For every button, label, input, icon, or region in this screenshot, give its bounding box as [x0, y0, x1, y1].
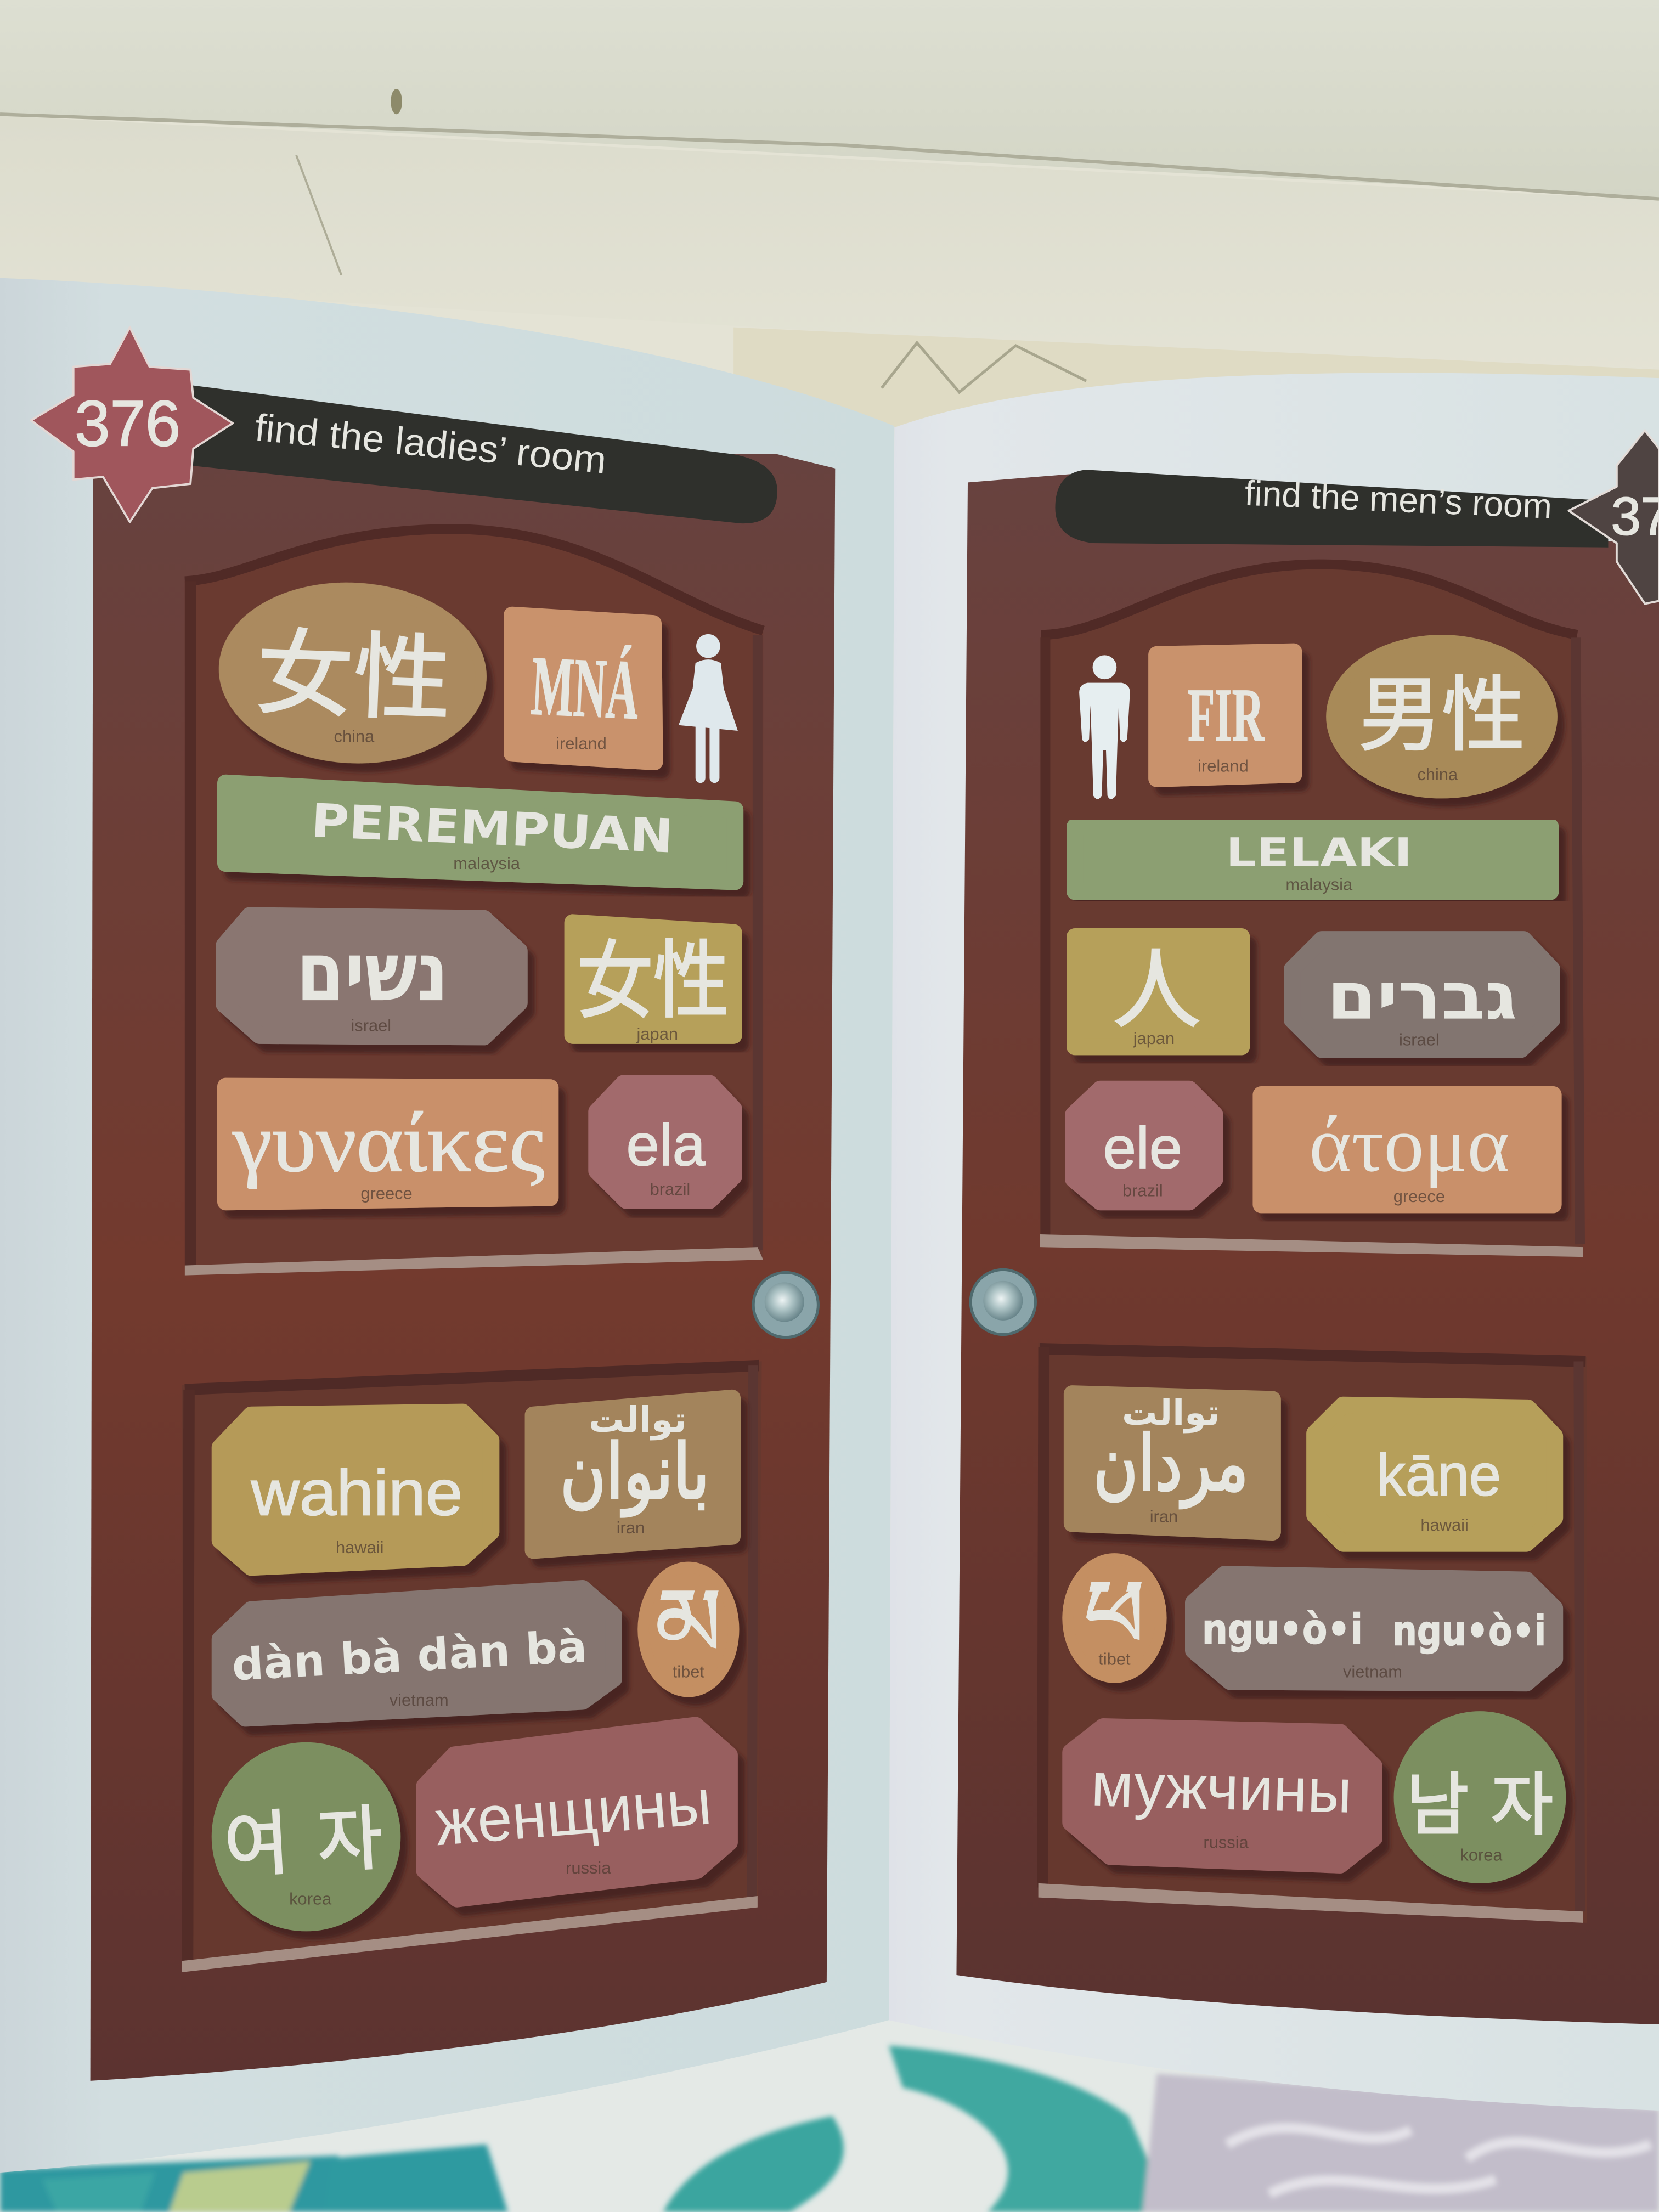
sign: korea: [1400, 1717, 1560, 1878]
sign: china: china: [1417, 765, 1458, 784]
sign: china: china: [334, 727, 375, 746]
sign: malaysia: LELAKI: [1226, 830, 1412, 876]
sign: russia: [1071, 1726, 1374, 1865]
panel: left door: [91, 454, 835, 2081]
sign: israel: israel: [1399, 1030, 1440, 1049]
left door upper panel frame: [185, 529, 763, 1276]
sign: japan: japan: [1133, 1029, 1175, 1048]
sign: israel: [1292, 940, 1552, 1049]
sign: china: 女性: [255, 597, 454, 739]
sign: russia: [425, 1725, 729, 1899]
sign: korea: korea: [1460, 1846, 1503, 1865]
sign: iran: توالت: [1122, 1392, 1220, 1434]
sign: malaysia: PEREMPUAN: [310, 794, 674, 864]
right door knob: [970, 1269, 1035, 1335]
sign: brazil: ela: [627, 1111, 706, 1178]
sign: tibet: ཕ: [1084, 1538, 1145, 1675]
sign: ireland: ireland: [556, 733, 607, 753]
sign: japan: [1075, 918, 1242, 1048]
sign: brazil: brazil: [650, 1180, 690, 1199]
sign: china: [220, 582, 486, 764]
icon: man: [1079, 655, 1130, 799]
sign: iran: iran: [1150, 1507, 1178, 1526]
sign: greece: greece: [360, 1184, 413, 1203]
sign: vietnam: vietnam: [390, 1690, 449, 1709]
sign: hawaii: wahine: [251, 1457, 462, 1530]
right door upper panel frame: [1040, 565, 1583, 1257]
sign: israel: israel: [351, 1016, 391, 1035]
sign: iran: توالت: [589, 1400, 687, 1441]
sign: iran: [533, 1398, 732, 1550]
sign: greece: [1261, 1094, 1553, 1206]
right door lower panel frame: [1039, 1343, 1587, 1923]
sign: ireland: FIR: [1188, 673, 1265, 758]
right header text: find the men’s room: [1244, 473, 1553, 526]
panel: right page: [889, 373, 1659, 2111]
sign: malaysia: malaysia: [1285, 875, 1353, 894]
sign: korea: korea: [289, 1889, 332, 1908]
sign: malaysia: [1075, 827, 1550, 894]
sign: malaysia: [225, 783, 735, 882]
sign: china: 男性: [1358, 648, 1525, 767]
sign: russia: женщины: [433, 1765, 714, 1859]
page number badge 377: [1568, 430, 1659, 604]
panel: right door: [956, 474, 1659, 2024]
sign: korea: 남자: [1407, 1750, 1553, 1848]
sign: iran: بانوان: [560, 1427, 709, 1517]
sign: vietnam: [1193, 1575, 1555, 1683]
sign: iran: مردان: [1093, 1419, 1249, 1508]
right header banner: [1055, 470, 1608, 548]
left door knob: [753, 1272, 818, 1338]
sign: japan: 人: [1113, 918, 1200, 1045]
sign: israel: גברים: [1327, 958, 1517, 1034]
sign: hawaii: hawaii: [336, 1538, 383, 1557]
sign: israel: נשים: [296, 925, 449, 1020]
panel: left page: [0, 278, 894, 2172]
sign: brazil: ele: [1103, 1114, 1182, 1181]
sign: korea: [217, 1748, 395, 1926]
sign: vietnam: dàn bà dàn bà: [230, 1621, 588, 1691]
sign: china: [1331, 640, 1552, 793]
number 376: 376: [75, 388, 180, 460]
sign: greece: άτομα: [1309, 1101, 1509, 1188]
sign: ireland: ireland: [1198, 757, 1249, 776]
vietnam word: second: ngu•ò•i: [1392, 1607, 1546, 1655]
left header banner: [190, 385, 777, 523]
sign: tibet: མ: [654, 1547, 722, 1684]
sign: vietnam: [220, 1588, 614, 1718]
sign: israel: [224, 916, 519, 1037]
sign: russia: russia: [566, 1858, 611, 1877]
sign: hawaii: [220, 1412, 491, 1567]
sign: japan: 女性: [577, 912, 729, 1035]
sign: brazil: [1074, 1089, 1215, 1202]
page number badge 376: [31, 328, 233, 522]
left header text: find the ladies’ room: [253, 406, 608, 482]
sign: vietnam: vietnam: [1343, 1662, 1402, 1681]
sign: russia: мужчины: [1090, 1750, 1353, 1826]
sign: japan: japan: [636, 1024, 678, 1043]
sign: hawaii: [1315, 1405, 1555, 1543]
icon: woman: [679, 634, 738, 783]
sign: greece: γυναίκες: [232, 1096, 545, 1189]
sign: malaysia: malaysia: [453, 854, 521, 873]
sign: russia: russia: [1203, 1833, 1249, 1852]
sign: ireland: MNÁ: [529, 639, 641, 737]
sign: brazil: [597, 1084, 733, 1200]
sign: iran: iran: [617, 1518, 645, 1537]
sign: korea: 여자: [222, 1781, 385, 1892]
sign: tibet: tibet: [1098, 1649, 1131, 1668]
sign: tibet: tibet: [673, 1662, 704, 1681]
sign: tibet: [1068, 1538, 1161, 1677]
sign: hawaii: kāne: [1377, 1442, 1501, 1508]
sign: greece: greece: [1393, 1187, 1445, 1206]
sign: brazil: brazil: [1122, 1181, 1163, 1200]
sign: iran: [1072, 1392, 1272, 1532]
left door lower panel frame: [182, 1361, 762, 1972]
sign: ireland: [1157, 652, 1294, 778]
sign: hawaii: hawaii: [1420, 1515, 1469, 1534]
sign: ireland: [512, 615, 654, 762]
vietnam word: first: ngu•ò•i: [1202, 1606, 1363, 1654]
